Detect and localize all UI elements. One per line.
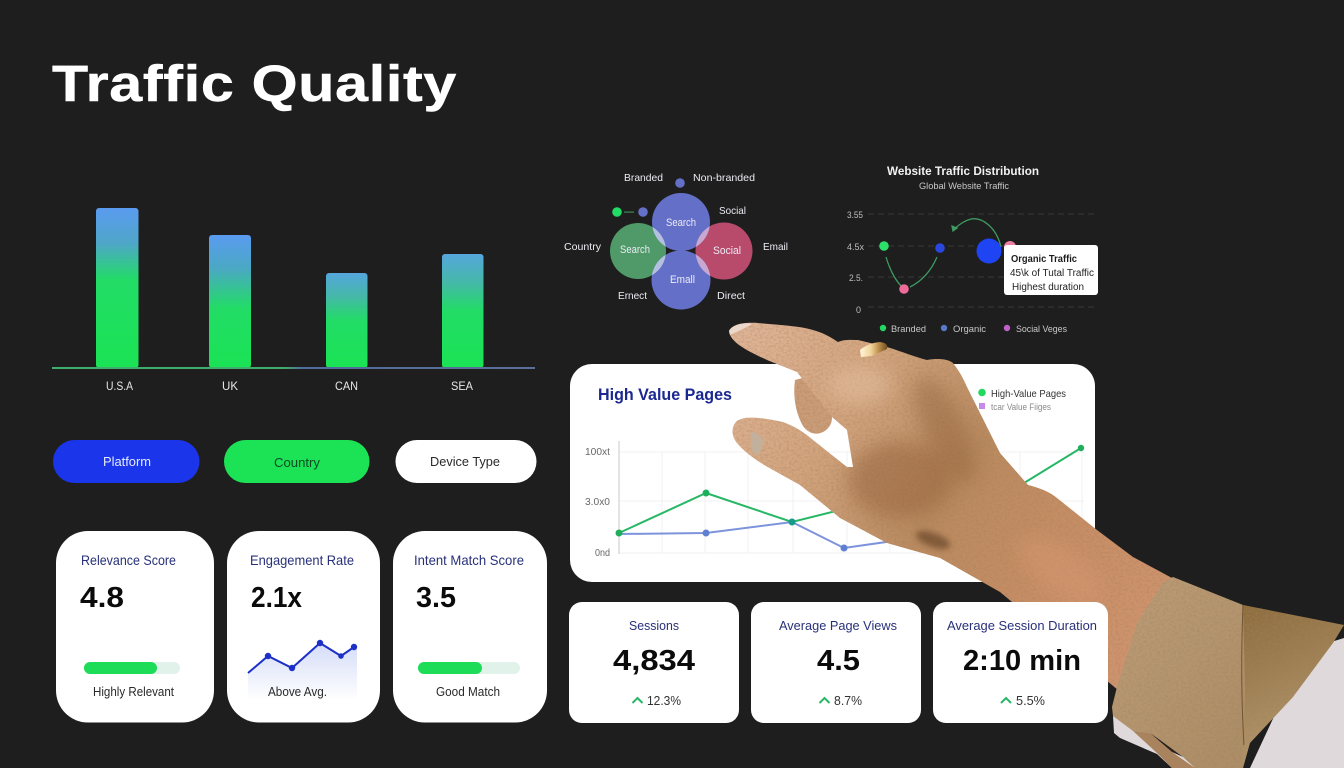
bar: CAN [326,273,368,393]
card: Average Page Views: 4.5 [817,645,860,677]
bar: U.S.A: U.S.A [106,379,133,393]
card: Intent Match Score [393,531,547,722]
pill: Country [224,440,370,483]
chart legend [880,324,1067,335]
pill: Country: Country [274,455,320,470]
bar: CAN: CAN [335,379,358,393]
card: Sessions: Sessions [629,618,679,633]
bar: SEA [442,254,484,393]
venn labels: Ernect [618,290,647,302]
venn labels: Country [564,241,602,253]
card: Average Session Duration: 5.5% [1016,693,1045,708]
icon: up arrow [820,698,830,703]
card: Relevance Score: Relevance Score [81,552,176,568]
card: Intent Match Score: Intent Match Score [414,552,524,568]
y axis labels: 0 [856,305,861,315]
chart heading [887,164,1039,192]
card: Engagement Rate: Engagement Rate [250,552,354,568]
bar chart: traffic by country [52,208,535,393]
card: Engagement Rate: 2.1x [251,582,302,614]
panel heading: High Value Pages [598,385,732,404]
card: Engagement Rate [227,531,380,722]
venn diagram: traffic sources [564,172,788,310]
tooltip: Organic Traffic: Highest duration [1012,282,1084,293]
card: Intent Match Score: Good Match [436,685,500,699]
venn labels: Search [620,244,650,256]
y axis labels: 4.5x [847,242,864,252]
bar: UK: UK [222,379,238,393]
venn labels: Branded [624,172,663,184]
venn labels: Search [666,217,696,229]
chart legend: Social Veges [1016,324,1067,335]
panel: score cards [56,531,547,722]
y axis labels [847,210,864,315]
panel legend: tcar Value Fiiges [991,402,1051,412]
icon: up arrow [1001,698,1011,703]
card: Average Session Duration: 2:10 min [963,645,1081,677]
chart: website traffic distribution [847,164,1098,335]
chart legend: Organic [953,324,986,335]
fingernails [729,323,763,455]
venn circles [610,178,752,310]
data points [879,238,1016,294]
y axis labels: 2.5. [849,273,863,283]
shirt cuff [1113,638,1344,768]
card: Average Page Views [751,602,921,723]
card: Relevance Score [56,531,214,722]
venn labels: Direct [717,290,745,302]
card: Relevance Score: 4.8 [80,582,124,614]
jacket cuff [1112,577,1344,768]
venn labels: Non-branded [693,172,755,184]
venn labels [564,172,788,302]
card: Intent Match Score: 3.5 [416,582,456,614]
chart legend: Branded [891,324,926,335]
card: Relevance Score: Highly Relevant [93,685,174,699]
illustration: pointing hand [729,323,1344,768]
tooltip: Organic Traffic: Organic Traffic [1011,254,1077,265]
icon: up arrow [632,698,642,703]
pill: Device Type [396,440,536,483]
panel: High Value Pages [570,364,1095,582]
pill: Device Type: Device Type [430,454,500,469]
card: Average Page Views: 8.7% [834,693,862,708]
panel: session metric cards [569,602,1108,723]
y axis labels: 100xt [585,447,610,458]
card: Average Session Duration: Average Session Duration [947,618,1097,633]
curves [886,219,1001,287]
bar: UK [209,235,251,393]
pill: Platform [53,440,200,483]
line: blue series [619,522,900,552]
filter pills [53,440,536,483]
card: Engagement Rate: Above Avg. [268,685,327,699]
venn labels: Emall [670,274,695,286]
bar: SEA: SEA [451,379,473,393]
panel legend: High-Value Pages [991,388,1066,400]
skin shading [829,363,1092,596]
tooltip: Organic Traffic: 45\k of Tutal Traffic [1010,268,1094,279]
venn labels: Social [713,245,741,257]
sparkline [248,640,357,700]
title: Traffic Quality [52,55,457,112]
panel legend [978,388,1066,412]
y axis labels [585,447,610,559]
card: Average Session Duration [933,602,1108,723]
card: Average Page Views: Average Page Views [779,618,897,633]
card: Sessions: 12.3% [647,693,681,708]
curled middle finger [794,376,832,434]
y axis labels: 3.55 [847,210,863,220]
chart heading: Global Website Traffic [919,181,1009,192]
card: Sessions [569,602,739,723]
bar: U.S.A [96,208,138,393]
venn labels: Email [763,241,788,253]
tooltip: Organic Traffic [1004,245,1098,295]
venn labels: Social [719,205,746,217]
card: Sessions: 4,834 [613,645,695,677]
y axis labels: 0nd [595,548,610,559]
line: green series [616,445,1084,536]
pill: Platform: Platform [103,454,151,469]
chart heading: Website Traffic Distribution [887,164,1039,178]
hand and forearm [729,323,1172,690]
y axis labels: 3.0x0 [585,497,610,508]
gold ring [860,342,887,357]
